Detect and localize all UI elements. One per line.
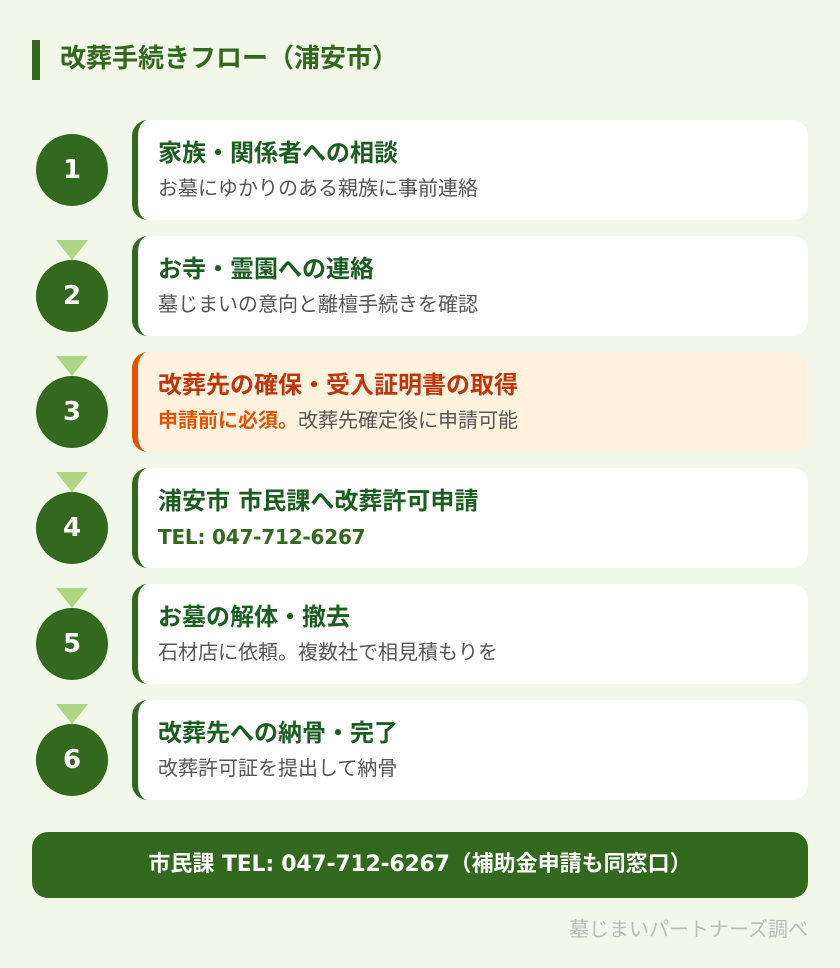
contact banner: 市民課 TEL: 047-712-6267（補助金申請も同窓口） bbox=[148, 852, 692, 877]
step 2 number: 2 bbox=[63, 281, 81, 311]
step 4 number: 4 bbox=[63, 513, 81, 543]
step 1 number bbox=[36, 134, 108, 206]
step 2 number bbox=[36, 260, 108, 332]
step 1 heading: 家族・関係者への相談 bbox=[158, 139, 398, 167]
title: 改葬手続きフロー（浦安市） bbox=[60, 44, 398, 74]
contact banner bbox=[32, 832, 808, 898]
arrow to step 5 bbox=[56, 588, 88, 608]
step 2 heading: お寺・霊園への連絡 bbox=[158, 255, 374, 283]
step 6 number bbox=[36, 724, 108, 796]
step 4 heading: 浦安市 市民課へ改葬許可申請 bbox=[158, 487, 478, 515]
step 6 number: 6 bbox=[63, 745, 81, 775]
arrow to step 2 bbox=[56, 240, 88, 260]
step 5 heading: お墓の解体・撤去 bbox=[158, 603, 350, 631]
arrow to step 4 bbox=[56, 472, 88, 492]
step 4 number bbox=[36, 492, 108, 564]
arrow to step 6 bbox=[56, 704, 88, 724]
title accent bar bbox=[32, 40, 40, 80]
step 5 description: 石材店に依頼。複数社で相見積もりを bbox=[158, 640, 498, 664]
step 6 description: 改葬許可証を提出して納骨 bbox=[158, 756, 397, 780]
arrow to step 3 bbox=[56, 356, 88, 376]
panel: step 1 bbox=[132, 120, 808, 220]
step 6 heading: 改葬先への納骨・完了 bbox=[158, 719, 398, 747]
panel: step 2 bbox=[132, 236, 808, 336]
step 3 heading: 改葬先の確保・受入証明書の取得 bbox=[158, 371, 518, 399]
panel: step 6 bbox=[132, 700, 808, 800]
step 3 number: 3 bbox=[63, 397, 81, 427]
step 2 description: 墓じまいの意向と離檀手続きを確認 bbox=[158, 292, 478, 316]
panel: step 4 bbox=[132, 468, 808, 568]
step 5 number: 5 bbox=[63, 629, 81, 659]
step 5 number bbox=[36, 608, 108, 680]
panel: step 3 highlighted bbox=[132, 352, 808, 452]
step 1 number: 1 bbox=[63, 155, 81, 185]
step 3 description: 申請前に必須。改葬先確定後に申請可能 bbox=[158, 408, 518, 432]
step 1 description: お墓にゆかりのある親族に事前連絡 bbox=[158, 176, 478, 200]
step 3 number bbox=[36, 376, 108, 448]
panel: step 5 bbox=[132, 584, 808, 684]
source note: 墓じまいパートナーズ調べ bbox=[569, 917, 808, 941]
step 4 phone number: TEL: 047-712-6267 bbox=[158, 525, 365, 549]
